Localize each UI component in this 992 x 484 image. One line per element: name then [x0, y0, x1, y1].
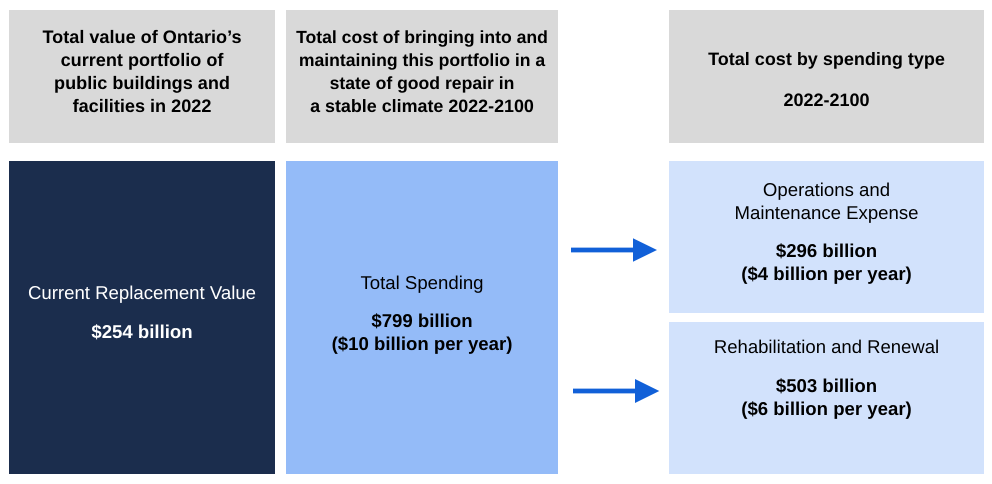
panel: rehabilitation and renewal: $503 billion [776, 375, 877, 396]
header: total cost: a stable climate 2022-2100 [310, 96, 534, 116]
header: total value: facilities in 2022 [73, 96, 211, 116]
panel: current replacement value [9, 161, 275, 474]
panel: rehabilitation and renewal: Rehabilitation and Renewal [714, 336, 939, 357]
header: total cost: Total cost of bringing into and [296, 27, 548, 47]
header: total value [9, 10, 275, 143]
header: total cost [286, 10, 558, 143]
header: total cost: state of good repair in [330, 73, 514, 93]
panel: current replacement value: $254 billion [91, 321, 193, 342]
panel: rehabilitation and renewal [669, 322, 984, 474]
header: spending type: Total cost by spending type [708, 49, 945, 69]
header: spending type [669, 10, 984, 143]
header: total cost: maintaining this portfolio in a [299, 50, 545, 70]
header: total value: public buildings and [54, 73, 230, 93]
panel: total spending: $799 billion [371, 310, 473, 331]
panel: operations and maintenance: Operations and [763, 179, 890, 200]
header: total value: Total value of Ontario’s [42, 27, 242, 47]
panel: current replacement value: Current Replacement Value [28, 282, 256, 303]
panel: total spending: ($10 billion per year) [332, 333, 512, 354]
header: spending type: 2022-2100 [783, 90, 870, 110]
panel: operations and maintenance [669, 161, 984, 313]
panel: operations and maintenance: ($4 billion per year) [741, 263, 912, 284]
panel: operations and maintenance: Maintenance Expense [734, 202, 918, 223]
arrow: to rehabilitation [573, 379, 660, 403]
header: total value: current portfolio of [61, 50, 223, 70]
arrow: to operations [571, 238, 657, 262]
panel: operations and maintenance: $296 billion [776, 240, 877, 261]
panel: rehabilitation and renewal: ($6 billion per year) [741, 398, 912, 419]
panel: total spending [286, 161, 558, 474]
panel: total spending: Total Spending [360, 272, 484, 293]
